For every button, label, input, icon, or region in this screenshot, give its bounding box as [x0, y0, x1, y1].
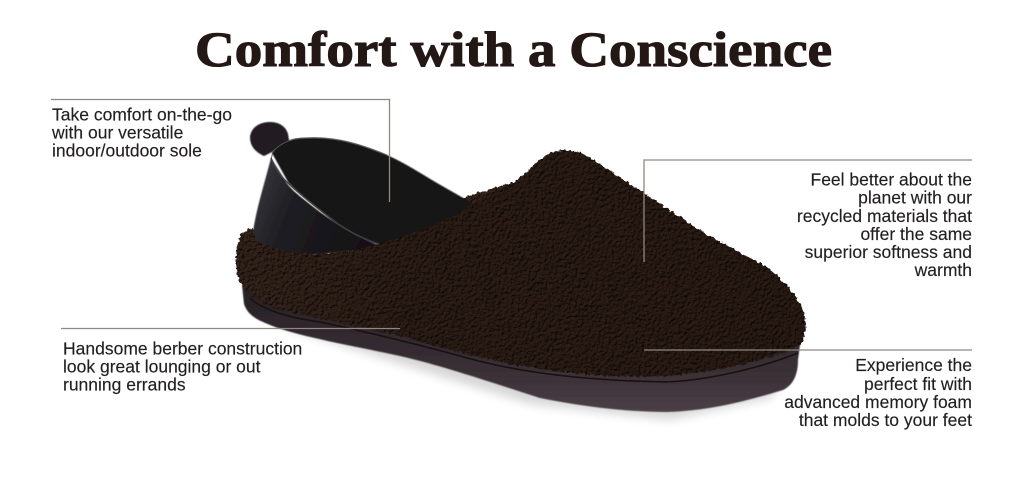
callout text: Handsome berber construction — [63, 338, 302, 358]
callout: sole — [51, 100, 390, 202]
leader line — [644, 160, 972, 262]
slipper illustration — [236, 122, 806, 420]
leather edge — [271, 158, 382, 245]
callout: recycled materials: recycled materials that — [797, 206, 972, 226]
callout: memory foam: advanced memory foam — [784, 392, 972, 412]
callout: memory foam: perfect fit with — [864, 374, 972, 394]
leader line — [61, 328, 400, 330]
callout text: Take comfort on-the-go — [52, 104, 232, 124]
callout text: Feel better about the — [810, 170, 972, 190]
callout: berber construction: look great lounging or out — [63, 356, 261, 376]
far side collar fleece — [462, 178, 530, 220]
leather heel — [253, 158, 385, 256]
callout: recycled materials — [644, 160, 972, 280]
callout: recycled materials: superior softness and — [805, 242, 972, 262]
callout: recycled materials: offer the same — [860, 224, 972, 244]
leader line — [644, 349, 972, 351]
callout: berber construction: running errands — [63, 374, 186, 394]
callout: sole: with our versatile — [51, 122, 183, 142]
sole welt line — [250, 298, 798, 382]
callout: recycled materials: warmth — [914, 260, 972, 280]
callout: sole: indoor/outdoor sole — [52, 140, 202, 160]
heel pull tab — [250, 122, 290, 156]
leader line — [51, 100, 390, 202]
shoe opening lining — [272, 138, 472, 246]
callout: memory foam: that molds to your feet — [799, 410, 972, 430]
outsole — [242, 285, 800, 412]
fleece upper — [236, 150, 806, 377]
lining rim — [271, 138, 387, 160]
callout text: Experience the — [855, 355, 972, 375]
callout: memory foam — [644, 350, 972, 430]
title: Comfort with a Conscience — [195, 21, 832, 77]
sole shadow — [255, 318, 790, 420]
callout: recycled materials: planet with our — [858, 188, 972, 208]
callout: berber construction — [61, 328, 400, 394]
